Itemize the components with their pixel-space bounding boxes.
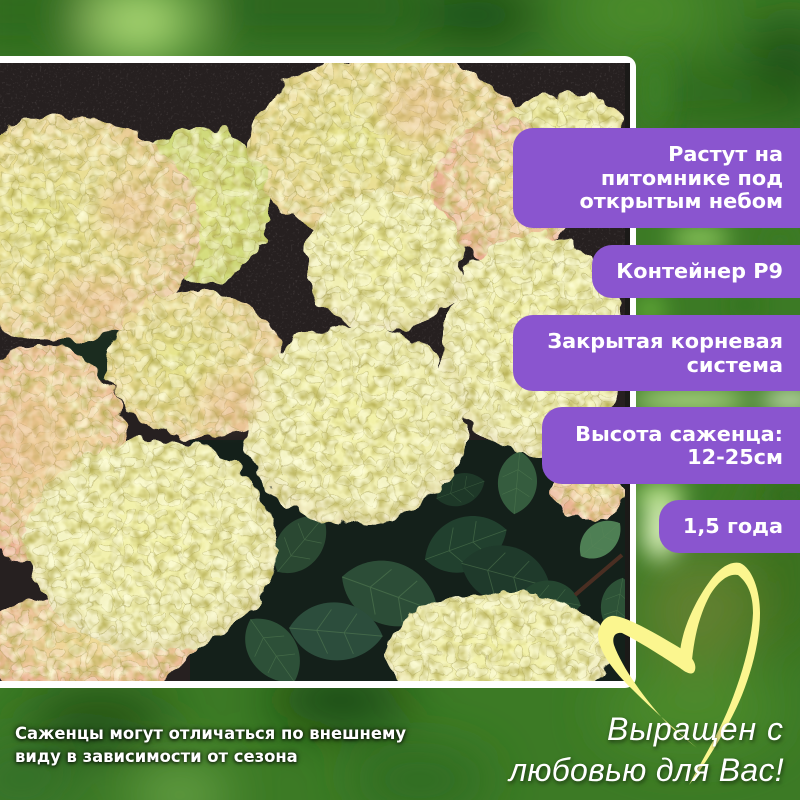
pill: seedling height (542, 407, 800, 484)
note about seedling appearance: Саженцы могут отличаться по внешнему (15, 724, 406, 743)
pill: container (592, 245, 800, 298)
slogan (508, 711, 786, 788)
pill: seedling height: Высота саженца: (575, 422, 783, 446)
pill: closed root system: система (687, 352, 783, 376)
pill: closed root system (513, 315, 800, 391)
pill: closed root system: Закрытая корневая (547, 329, 783, 353)
dark photo edge (625, 63, 630, 681)
slogan: любовью для Вас! (509, 752, 784, 788)
pill: container: Контейнер Р9 (616, 259, 783, 283)
pill: grown outdoors: питомнике под (601, 166, 783, 190)
slogan: Выращен с (607, 711, 784, 747)
pill: grown outdoors: открытым небом (579, 189, 783, 213)
pill: grown outdoors: Растут на (668, 142, 783, 166)
photo frame: hydrangea photograph (0, 56, 636, 688)
pink tints on blooms (0, 78, 460, 484)
pill: grown outdoors (513, 128, 800, 228)
hydrangea blooms (0, 54, 627, 712)
pill: seedling height: 12-25см (687, 445, 783, 469)
pill: age (659, 500, 800, 553)
white rounded frame (0, 56, 636, 688)
pill: age: 1,5 года (683, 514, 783, 538)
note about seedling appearance (12, 724, 408, 769)
dark foliage (60, 320, 640, 695)
note about seedling appearance: виду в зависимости от сезона (15, 746, 298, 766)
